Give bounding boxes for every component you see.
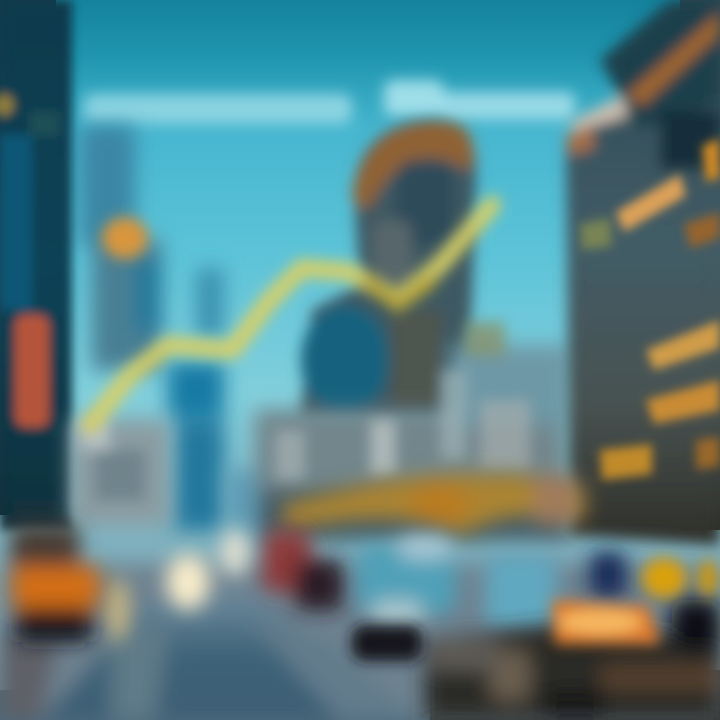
muddy mid-rise district — [70, 345, 570, 540]
edge backing for right building — [680, 0, 720, 530]
orange globe on tower — [102, 217, 148, 259]
central tower — [300, 120, 476, 420]
white-blue van — [356, 535, 557, 630]
blurred headline glow — [84, 80, 575, 124]
building detail marks — [80, 322, 530, 500]
bottom right traffic — [425, 552, 720, 720]
yellow headlight glow — [642, 558, 718, 598]
blue foreground tower — [168, 362, 224, 530]
red car — [262, 530, 343, 610]
orange taxi on the left — [10, 525, 100, 642]
edge backing for dark traffic — [430, 670, 720, 720]
yellow elevated band — [282, 474, 585, 535]
dark car shadow — [352, 625, 422, 661]
right office building — [566, 0, 720, 545]
edge backing for street — [0, 690, 430, 720]
right building lit windows — [580, 138, 720, 480]
left dark building — [0, 0, 72, 530]
rising yellow trend line — [90, 205, 492, 425]
street-level lights — [108, 528, 249, 642]
background towers left of centre — [80, 125, 224, 370]
glowing orange car light — [552, 600, 660, 644]
street and road — [0, 565, 720, 720]
edge backing for left building — [0, 0, 56, 515]
